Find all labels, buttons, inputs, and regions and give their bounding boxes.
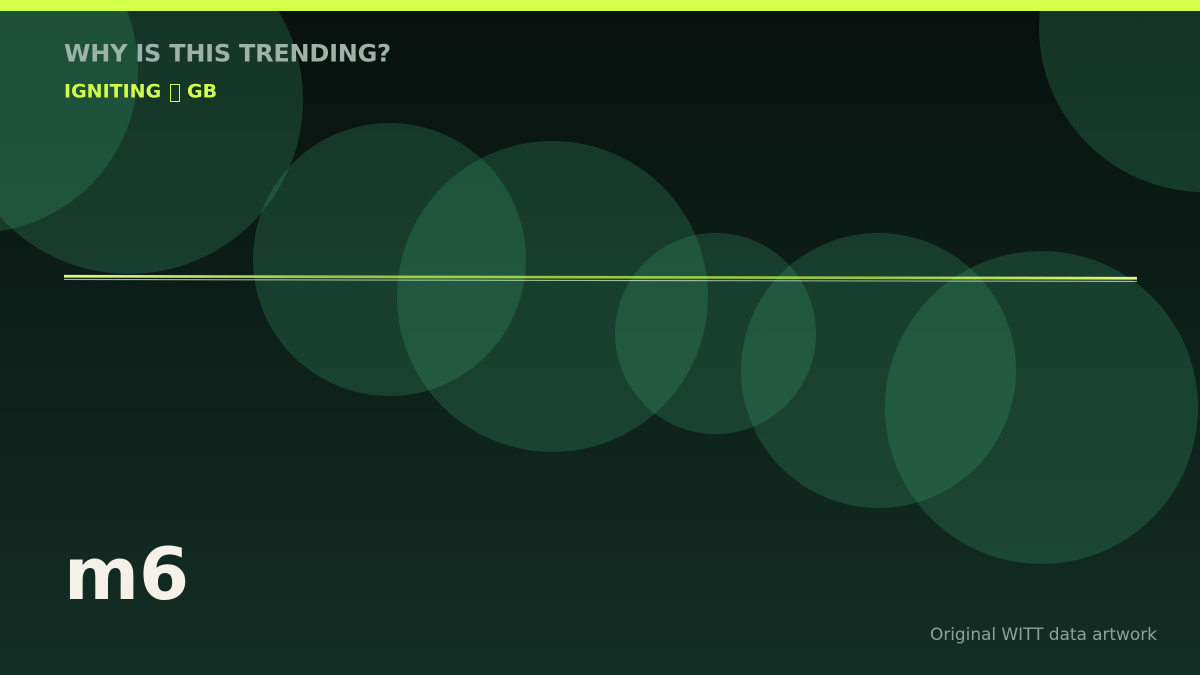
subtitle [64,80,217,102]
main term: m6 [64,532,189,616]
icon: missing glyph box [170,84,180,102]
top accent bar [0,0,1200,11]
trend lines [64,275,1137,282]
title: WHY IS THIS TRENDING? [64,40,391,68]
subtitle: IGNITING [64,80,161,102]
subtitle: GB [187,80,217,102]
footer credit: Original WITT data artwork [930,625,1157,645]
